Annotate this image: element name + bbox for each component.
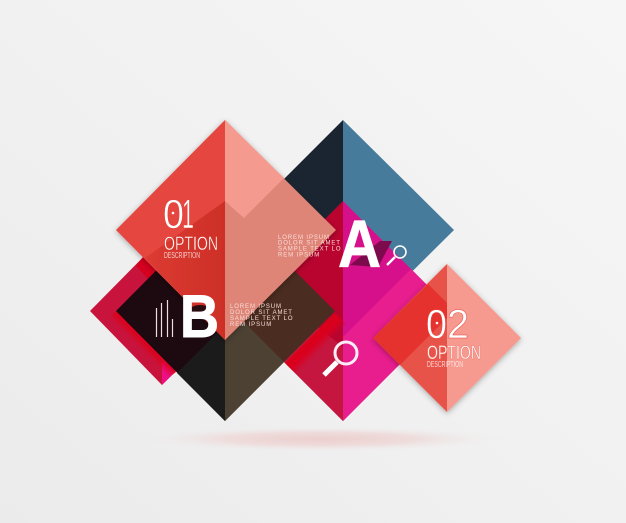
icon: small magnifier — [387, 246, 406, 265]
text block: lorem upper: DOLOR SIT AMET — [278, 240, 341, 246]
text block: lorem lower — [230, 304, 293, 328]
label: 02 option: 2 — [447, 301, 469, 347]
label: 01 option: 1 — [182, 191, 194, 237]
diamond: dark — [116, 201, 335, 421]
label: 01 option: 0 — [163, 191, 184, 237]
label: 01 option — [163, 191, 218, 260]
icon: large magnifier — [324, 342, 357, 375]
diamond: salmon 02 — [373, 264, 521, 412]
diamond: red 01 — [116, 120, 336, 340]
diamond: magenta — [233, 201, 453, 421]
text block: lorem upper — [278, 235, 341, 258]
letter A with shadow: A — [338, 207, 381, 282]
icon: bars — [156, 300, 172, 337]
label: 02 option: 0 — [426, 301, 447, 347]
ground shadow — [132, 426, 508, 452]
text block: lorem upper: SAMPLE TEXT LO — [278, 246, 341, 252]
text block: lorem lower: LOREM IPSUM — [230, 304, 282, 310]
label: 02 option: OPTION — [427, 343, 481, 364]
text block: lorem lower: REM IPSUM — [230, 322, 272, 328]
diamond: blue — [233, 120, 454, 340]
label: 01 option: DESCRIPTION — [164, 251, 200, 260]
letter B with inner shadow: B — [180, 283, 219, 350]
text block: lorem lower: SAMPLE TEXT LO — [230, 316, 293, 322]
diamond: crimson back — [90, 237, 237, 385]
label: 02 option — [426, 301, 481, 369]
text block: lorem upper: REM IPSUM — [278, 252, 320, 258]
text block: lorem upper: LOREM IPSUM — [278, 235, 330, 241]
label: 01 option: OPTION — [164, 234, 218, 255]
label: 02 option: DESCRIPTION — [427, 360, 463, 369]
text block: lorem lower: DOLOR SIT AMET — [230, 310, 293, 316]
